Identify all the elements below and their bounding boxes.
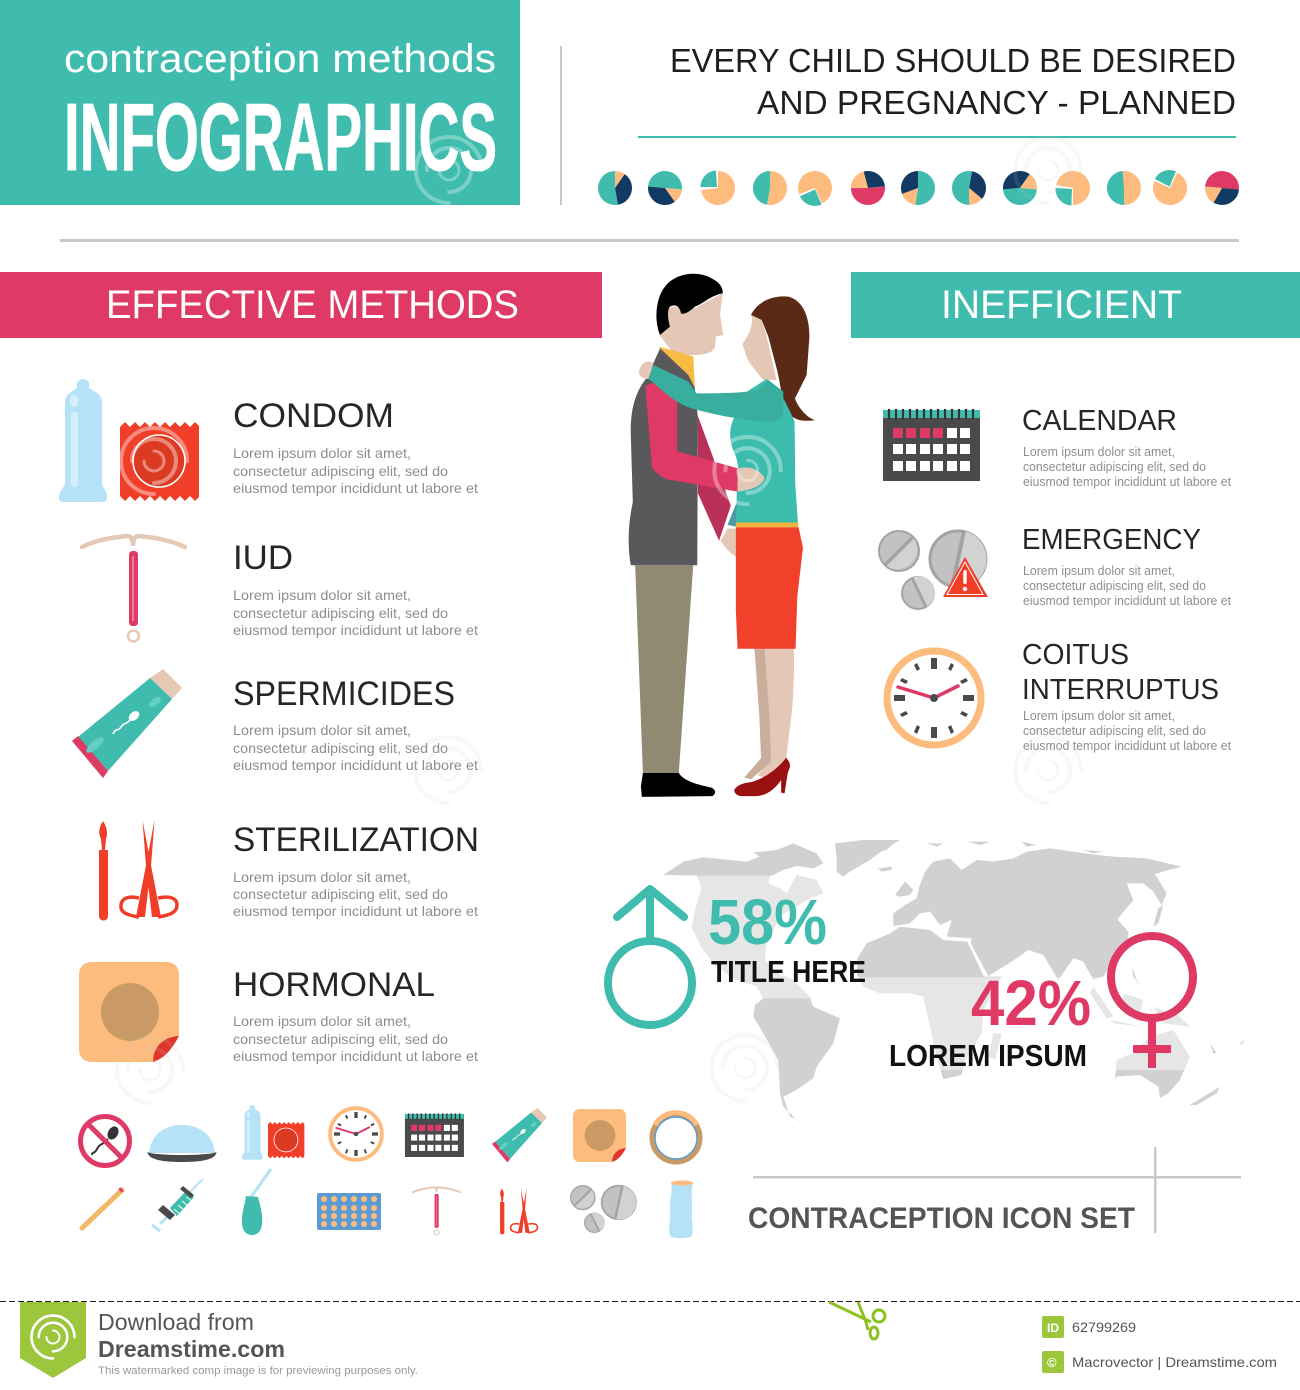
icon: emergency pills with warning	[879, 531, 988, 609]
footer: dreamstime badge	[20, 1302, 86, 1378]
method: coitus interruptus: eiusmod tempor incididunt ut labore et	[1023, 739, 1232, 753]
header title: INFOGRAPHICS	[64, 84, 497, 191]
method: spermicides: SPERMICIDES	[233, 675, 455, 713]
icon: douche bulb	[242, 1169, 271, 1235]
caption: contraception icon set: CONTRACEPTION ICON SET	[748, 1202, 1135, 1235]
icon: small pills	[571, 1186, 636, 1232]
icon: small clock	[330, 1108, 382, 1160]
footer: copyright: ©	[1047, 1355, 1057, 1370]
method: coitus interruptus: consectetur adipiscing elit, sed do	[1023, 724, 1206, 738]
header subtitle: contraception methods	[64, 37, 496, 81]
method: sterilization: consectetur adipiscing elit, sed do	[233, 886, 448, 902]
method: calendar: consectetur adipiscing elit, sed do	[1023, 460, 1206, 474]
statistic: 58% title here: 58%	[708, 886, 827, 958]
method: spermicides: eiusmod tempor incididunt ut labore et	[233, 757, 478, 773]
icon: syringe	[152, 1179, 203, 1231]
icon: small wrapper	[268, 1122, 304, 1158]
method: calendar	[1022, 405, 1232, 489]
method: hormonal: Lorem ipsum dolor sit amet,	[233, 1013, 411, 1029]
icon: hormonal patch	[79, 962, 179, 1062]
method: calendar: eiusmod tempor incididunt ut labore et	[1023, 475, 1232, 489]
icon: calendar	[883, 409, 980, 481]
icon: small tube	[492, 1108, 547, 1162]
footer: image id	[1042, 1316, 1136, 1338]
icon: condom and wrapper	[59, 379, 199, 502]
method: coitus interruptus: INTERRUPTUS	[1022, 674, 1219, 706]
icon: IUD	[82, 536, 185, 642]
method: emergency: EMERGENCY	[1022, 524, 1201, 556]
icon: small IUD	[413, 1187, 460, 1235]
icon: vaginal ring	[652, 1113, 700, 1162]
method: sterilization: STERILIZATION	[233, 821, 479, 859]
method: hormonal: eiusmod tempor incididunt ut labore et	[233, 1048, 478, 1064]
slogan: AND PREGNANCY - PLANNED	[757, 84, 1236, 121]
method: IUD: Lorem ipsum dolor sit amet,	[233, 587, 411, 603]
icon: clock	[887, 651, 981, 745]
method: emergency: consectetur adipiscing elit, sed do	[1023, 579, 1206, 593]
footer: download text	[98, 1309, 418, 1377]
method: sterilization: eiusmod tempor incididunt ut labore et	[233, 903, 478, 919]
method: hormonal: HORMONAL	[233, 966, 435, 1004]
icon: female condom	[669, 1180, 693, 1238]
icon: small condom	[242, 1105, 263, 1160]
method: IUD	[233, 539, 478, 638]
method: coitus interruptus: Lorem ipsum dolor sit amet,	[1023, 709, 1175, 723]
method: coitus interruptus: COITUS	[1022, 639, 1129, 671]
method: IUD: IUD	[233, 539, 293, 577]
icon: small calendar	[405, 1113, 464, 1157]
slogan	[670, 42, 1236, 121]
banner: inefficient	[851, 272, 1300, 338]
statistic: 42% lorem ipsum: LOREM IPSUM	[889, 1038, 1087, 1073]
footer: image id: 62799269	[1072, 1319, 1136, 1335]
footer: image id: ID	[1047, 1321, 1059, 1335]
method: calendar: Lorem ipsum dolor sit amet,	[1023, 445, 1175, 459]
statistic: 42% lorem ipsum	[889, 967, 1091, 1073]
illustration: embracing couple	[629, 274, 816, 797]
pie chart row	[603, 176, 1234, 200]
footer: copyright: Macrovector | Dreamstime.com	[1072, 1354, 1277, 1370]
method: sterilization: Lorem ipsum dolor sit amet,	[233, 869, 411, 885]
header panel	[0, 0, 520, 205]
statistic: 58% title here: TITLE HERE	[711, 954, 866, 989]
icon: small patch	[573, 1109, 626, 1162]
icon: small scalpel and scissors	[500, 1188, 537, 1234]
method: spermicides: consectetur adipiscing elit, sed do	[233, 740, 448, 756]
footer: copyright	[1042, 1351, 1277, 1373]
icon: female symbol	[1111, 936, 1193, 1068]
method: condom: CONDOM	[233, 397, 394, 435]
statistic: 58% title here	[708, 886, 866, 989]
method: hormonal	[233, 966, 478, 1064]
banner: effective methods: EFFECTIVE METHODS	[106, 283, 519, 327]
icon: male symbol	[608, 889, 692, 1025]
method: coitus interruptus	[1022, 639, 1232, 753]
icon: no sperm sign	[80, 1116, 130, 1166]
footer: download text: This watermarked comp image is for previewing purposes only.	[98, 1365, 418, 1377]
method: condom	[233, 397, 478, 496]
icon: pill blister	[317, 1193, 381, 1230]
method: emergency: Lorem ipsum dolor sit amet,	[1023, 564, 1175, 578]
statistic: 42% lorem ipsum: 42%	[971, 967, 1091, 1039]
icon: spermicide tube	[72, 669, 182, 778]
icon: scalpel and scissors	[99, 820, 177, 920]
method: spermicides	[233, 675, 478, 773]
method: condom: Lorem ipsum dolor sit amet,	[233, 445, 411, 461]
method: condom: consectetur adipiscing elit, sed do	[233, 463, 448, 479]
method: spermicides: Lorem ipsum dolor sit amet,	[233, 722, 411, 738]
method: IUD: eiusmod tempor incididunt ut labore et	[233, 622, 478, 638]
footer: scissors icon	[829, 1302, 885, 1339]
chart: world map	[663, 840, 1245, 1123]
method: emergency: eiusmod tempor incididunt ut labore et	[1023, 594, 1232, 608]
banner: inefficient: INEFFICIENT	[941, 283, 1182, 327]
method: calendar: CALENDAR	[1022, 405, 1177, 437]
icon: diaphragm	[148, 1125, 216, 1162]
slogan: EVERY CHILD SHOULD BE DESIRED	[670, 42, 1236, 79]
icon set	[80, 1105, 700, 1238]
method: condom: eiusmod tempor incididunt ut labore et	[233, 480, 478, 496]
footer: download text: Download from	[98, 1309, 254, 1335]
banner: effective methods	[0, 272, 602, 338]
method: hormonal: consectetur adipiscing elit, sed do	[233, 1031, 448, 1047]
footer: download text: Dreamstime.com	[98, 1336, 285, 1362]
method: emergency	[1022, 524, 1232, 608]
icon: implant rod	[82, 1189, 122, 1228]
method: IUD: consectetur adipiscing elit, sed do	[233, 605, 448, 621]
method: sterilization	[233, 821, 479, 919]
